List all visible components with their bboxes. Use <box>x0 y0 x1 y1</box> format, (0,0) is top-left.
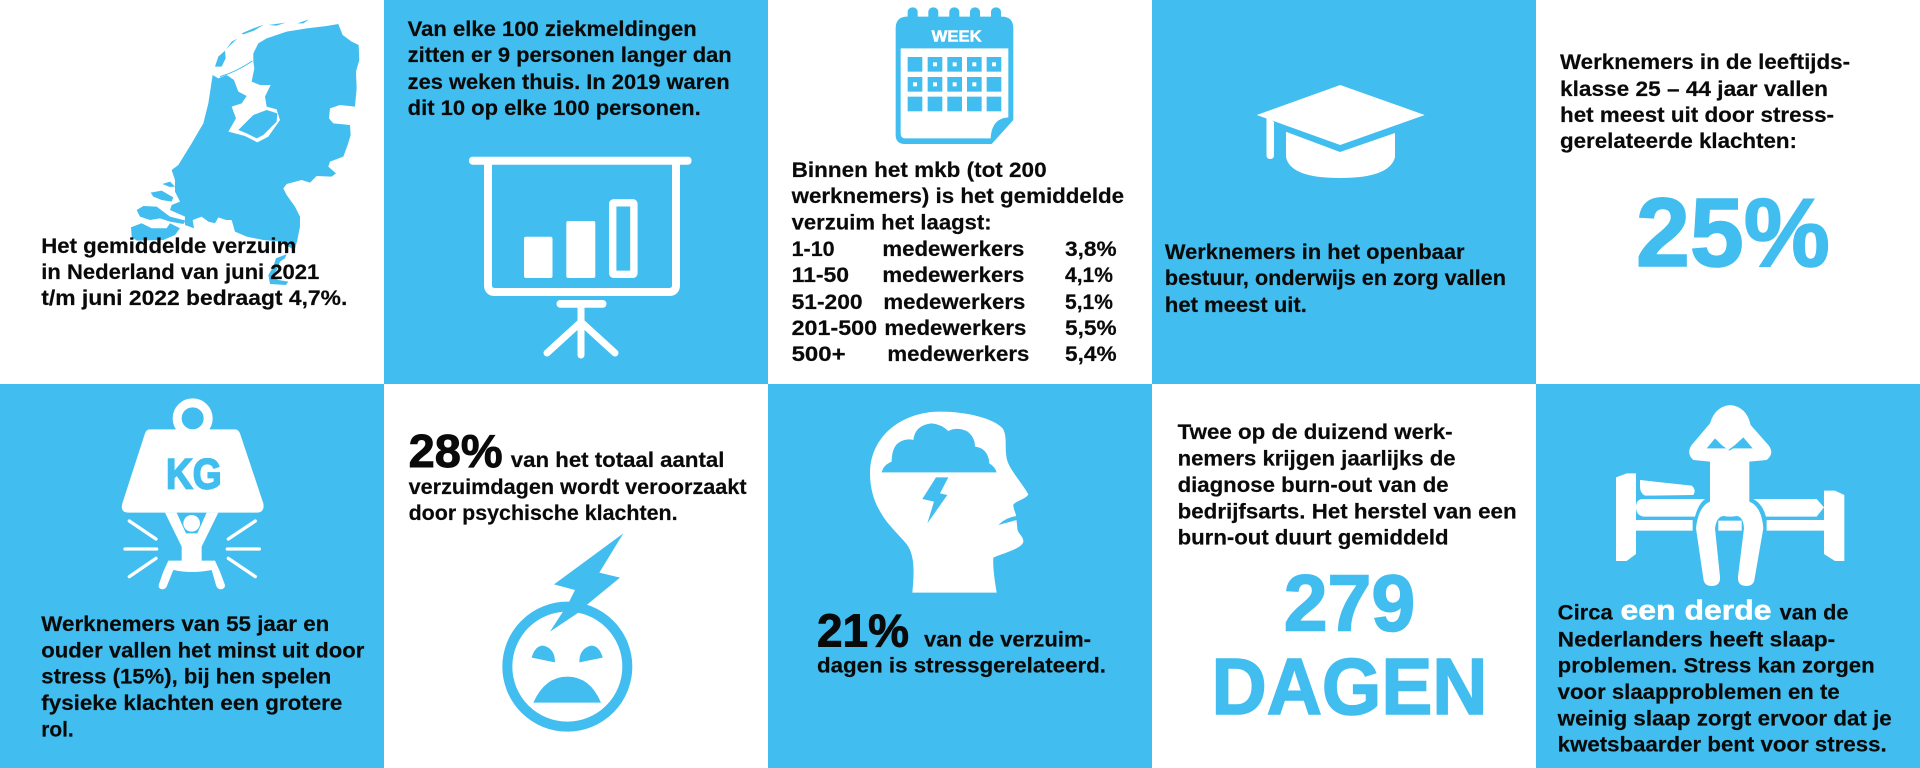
table: absence per company size: medewerkers <box>884 317 1026 340</box>
text: public sector: bestuur, onderwijs en zorg vallen <box>1165 267 1506 290</box>
icon: presentation board with bar chart <box>469 157 692 355</box>
table: absence per company size: medewerkers <box>883 291 1025 314</box>
icon: person lifting weight <box>122 403 264 589</box>
text: 21% stress related: dagen is stressgerelateerd. <box>817 655 1106 678</box>
text: average absence: in Nederland van juni 2021 <box>41 261 320 284</box>
table: absence per company size: medewerkers <box>882 238 1024 261</box>
text: sleep problems <box>1557 595 1892 756</box>
text: sleep problems: problemen. Stress kan zorgen <box>1558 655 1875 678</box>
big number: 25%: 25% <box>1636 178 1830 287</box>
text: SME intro: verzuim het laagst: <box>792 212 992 234</box>
text: burn-out <box>1178 421 1517 550</box>
text: age 55 and older: stress (15%), bij hen spelen <box>41 666 331 689</box>
table: absence per company size: 5,5% <box>1065 317 1117 340</box>
text: 28% of sick days: door psychische klachten. <box>409 502 678 525</box>
panel: sleep problems <box>1536 384 1920 768</box>
table: absence per company size: 4,1% <box>1065 264 1113 287</box>
text: sleep problems: van de <box>1780 602 1848 625</box>
text: SME intro <box>791 159 1124 234</box>
text: sleep problems: kwetsbaarder bent voor stress. <box>1558 733 1887 756</box>
big number: 279 dagen: 279 <box>1284 559 1415 648</box>
table: absence per company size: medewerkers <box>887 343 1029 366</box>
icon: person lifting weight: KG <box>166 450 222 498</box>
text: age group <box>1560 51 1850 153</box>
panel: age 55 and older <box>0 384 384 768</box>
text: 21% stress related: van de verzuim- <box>924 629 1091 652</box>
text: SME intro: werknemers) is het gemiddelde <box>791 185 1124 208</box>
big number: 279 dagen <box>1212 559 1488 731</box>
text: sick reports: Van elke 100 ziekmeldingen <box>408 18 697 41</box>
table: absence per company size: 3,8% <box>1065 238 1117 261</box>
text: age group: het meest uit door stress- <box>1560 104 1834 127</box>
text: burn-out: Twee op de duizend werk- <box>1178 421 1453 444</box>
text: age 55 and older: ouder vallen het minst uit door <box>41 639 364 662</box>
text: sleep problems: voor slaapproblemen en te <box>1558 681 1840 704</box>
table: absence per company size <box>792 238 1117 366</box>
text: 28% of sick days: verzuimdagen wordt veroorzaakt <box>409 476 747 499</box>
icon: head with storm cloud <box>870 412 1028 593</box>
text: burn-out: nemers krijgen jaarlijks de <box>1178 448 1456 471</box>
text: sleep problems: weinig slaap zorgt ervoor dat je <box>1557 707 1892 730</box>
icon: angry face with lightning bolt <box>507 533 627 727</box>
text: 28% of sick days: van het totaal aantal <box>511 449 724 472</box>
text: public sector <box>1165 241 1506 317</box>
panel: long-term sick reports <box>384 0 768 384</box>
text: average absence: Het gemiddelde verzuim <box>41 235 296 258</box>
text: sleep problems: Nederlanders heeft slaap- <box>1558 628 1835 651</box>
text: 28% of sick days: 28% <box>409 425 503 477</box>
text: age 55 and older: fysieke klachten een grotere <box>41 692 342 715</box>
text: average absence: t/m juni 2022 bedraagt 4,7%. <box>41 287 347 310</box>
text: sick reports: dit 10 op elke 100 personen. <box>408 97 701 120</box>
panel: burn-out recovery <box>1152 384 1536 768</box>
text: SME intro: Binnen het mkb (tot 200 <box>792 159 1047 182</box>
big number: 279 dagen: DAGEN <box>1212 642 1488 731</box>
text: sleep problems: Circa <box>1558 602 1613 625</box>
text: sleep problems: een derde <box>1620 595 1772 626</box>
text: burn-out: bedrijfsarts. Het herstel van een <box>1178 500 1517 523</box>
text: age 55 and older <box>41 613 364 741</box>
icon: week calendar <box>896 7 1013 144</box>
panel: average absence map <box>0 0 384 384</box>
text: age group: Werknemers in de leeftijds- <box>1560 51 1850 74</box>
table: absence per company size: medewerkers <box>882 264 1024 287</box>
panel: stress related absence <box>768 384 1152 768</box>
table: absence per company size: 201-500 <box>792 317 877 340</box>
table: absence per company size: 500+ <box>792 343 846 366</box>
text: age 55 and older: Werknemers van 55 jaar en <box>41 613 329 636</box>
panel: age group 25-44 <box>1536 0 1920 384</box>
table: absence per company size: 51-200 <box>792 291 863 314</box>
text: 28% of sick days <box>409 425 747 525</box>
text: age 55 and older: rol. <box>41 718 74 741</box>
text: public sector: het meest uit. <box>1165 294 1307 317</box>
text: burn-out: diagnose burn-out van de <box>1178 474 1449 497</box>
panel: public sector <box>1152 0 1536 384</box>
text: age group: gerelateerde klachten: <box>1560 130 1797 153</box>
icon: graduation cap <box>1257 85 1425 178</box>
text: 21% stress related <box>817 605 1106 678</box>
text: 21% stress related: 21% <box>817 605 909 657</box>
icon: map of the Netherlands <box>131 19 359 285</box>
text: burn-out: burn-out duurt gemiddeld <box>1178 527 1449 550</box>
panel: absence in SMEs <box>768 0 1152 384</box>
text: average absence <box>41 235 347 310</box>
table: absence per company size: 5,4% <box>1065 343 1117 366</box>
text: sick reports <box>408 18 732 120</box>
icon: week calendar: WEEK <box>932 29 982 46</box>
icon: person sitting on bed <box>1616 405 1844 586</box>
table: absence per company size: 1-10 <box>792 238 835 261</box>
table: absence per company size: 5,1% <box>1065 291 1113 314</box>
text: sick reports: zitten er 9 personen langer dan <box>408 44 732 67</box>
text: public sector: Werknemers in het openbaar <box>1165 241 1464 264</box>
text: age group: klasse 25 – 44 jaar vallen <box>1560 78 1828 101</box>
text: sick reports: zes weken thuis. In 2019 waren <box>408 71 730 94</box>
panel: psychological complaints <box>384 384 768 768</box>
table: absence per company size: 11-50 <box>792 264 849 287</box>
